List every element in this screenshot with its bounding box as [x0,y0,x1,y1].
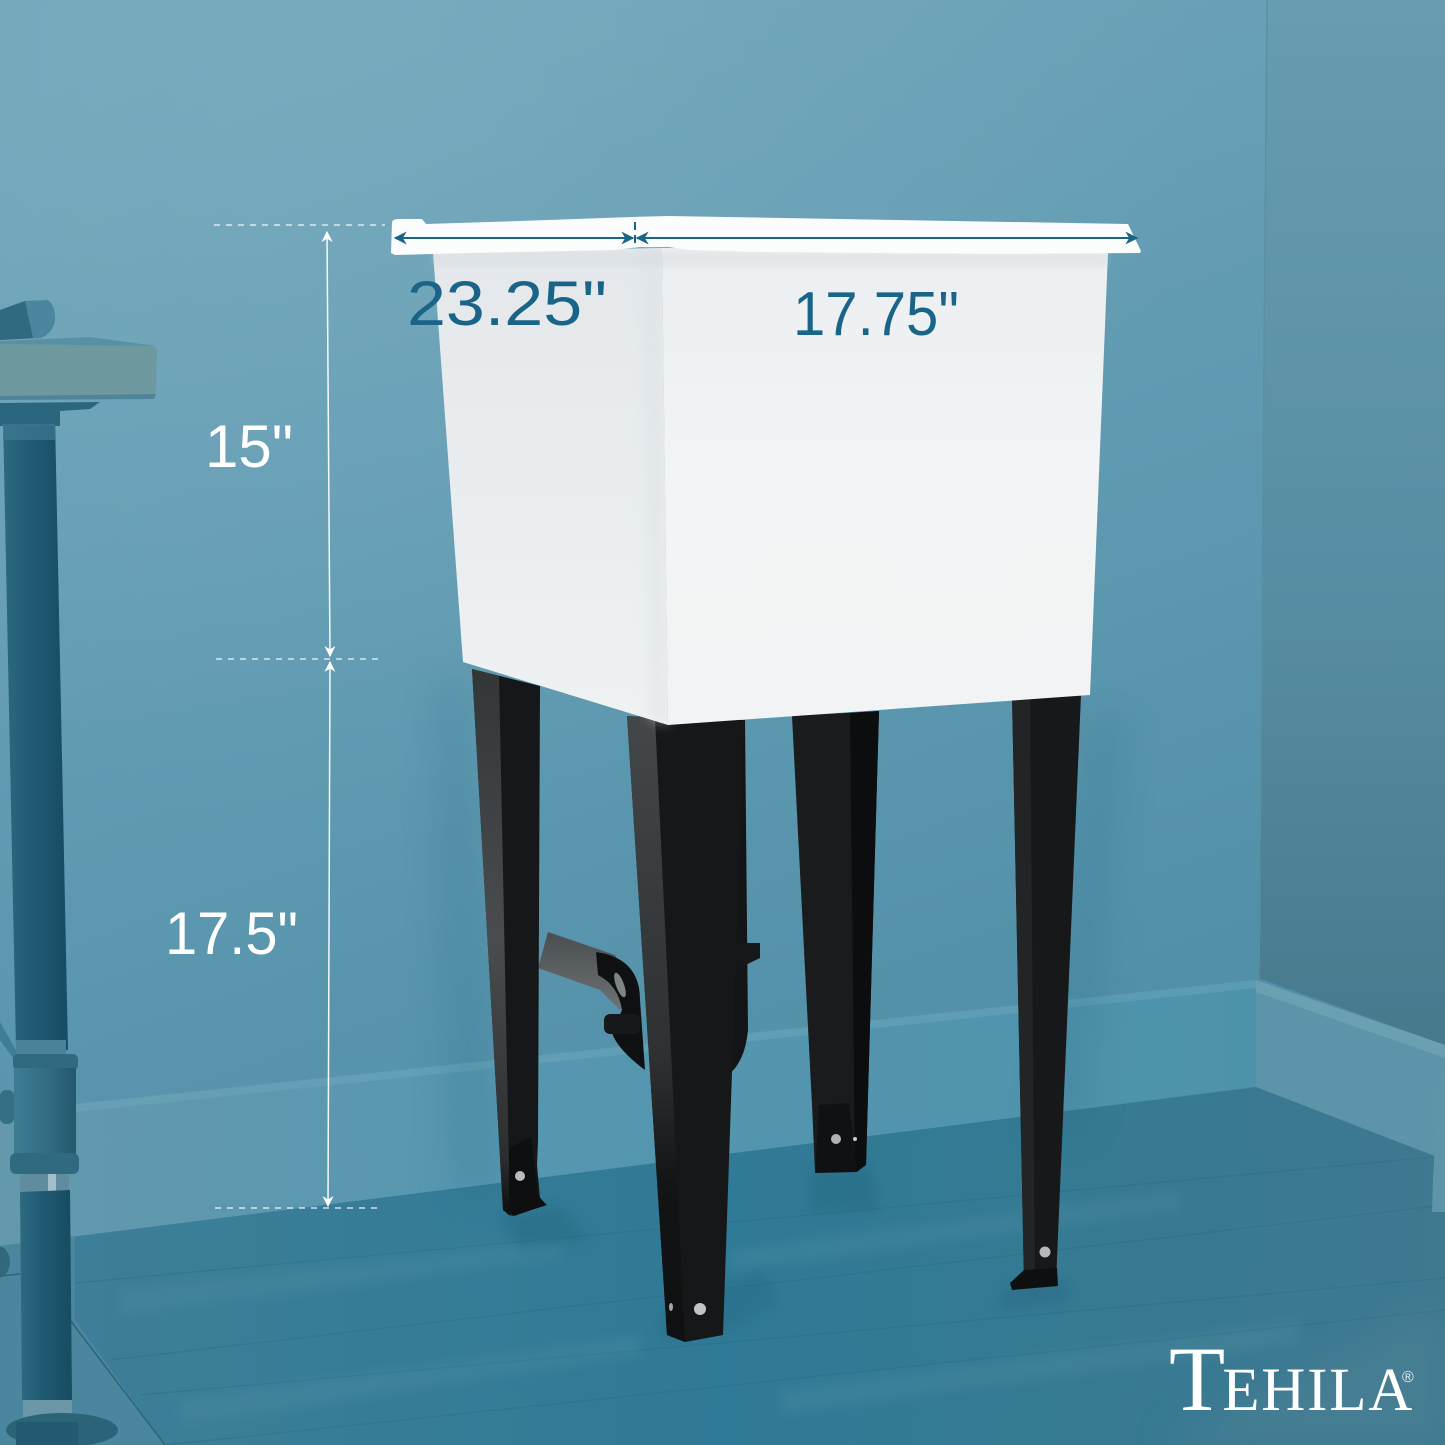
left table with metal pipe leg [0,300,157,1445]
height dimension guides and arrows [214,225,385,1208]
tub right face [662,248,1108,725]
back left leg [472,669,547,1216]
Tehila logo: TEHILA [1169,1328,1414,1430]
front right leg [1010,695,1081,1290]
label: basin height: 15" [205,413,293,480]
tub rim [391,216,1141,255]
tool on table [0,300,55,340]
label: leg height: 17.5" [165,900,298,967]
right edge object [1432,1070,1445,1212]
table top [0,341,157,400]
shadows cast on wall and floor [430,680,1130,1340]
white utility tub [391,216,1141,725]
tub left face [433,248,668,725]
label: tub depth: 23.25" [407,269,607,339]
black legs and drain [472,669,1081,1342]
Tehila logo: ® [1402,1369,1414,1386]
baseboard [0,980,1445,1246]
top width dimension arrows [395,222,1137,246]
back right leg [792,711,879,1173]
label: tub width: 17.75" [793,280,959,349]
wooden floor [0,1087,1445,1445]
table pipe leg [0,402,118,1445]
front center leg [627,716,744,1342]
drain trap [538,720,760,1075]
